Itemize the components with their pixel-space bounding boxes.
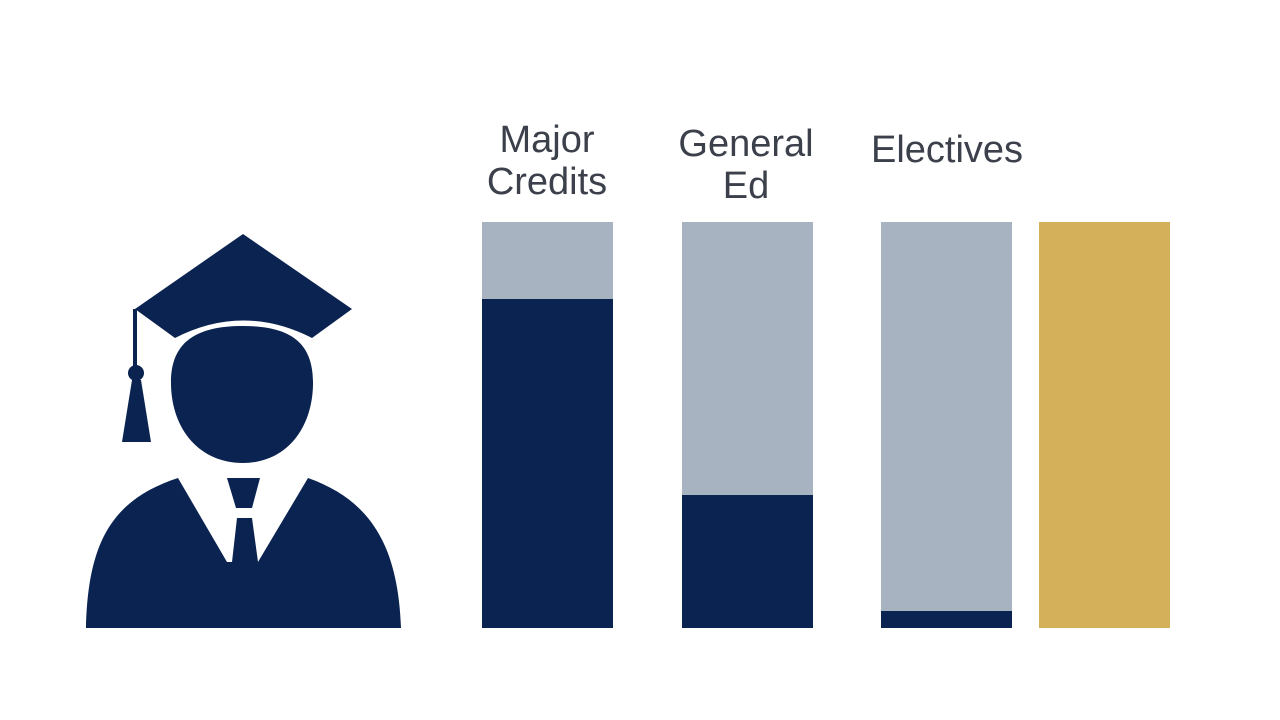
label: general ed: General	[678, 123, 814, 165]
label: electives: Electives	[871, 129, 1023, 171]
icon: graduation cap	[135, 234, 352, 338]
bar: major credits	[482, 222, 613, 628]
label: major credits: Credits	[487, 161, 607, 203]
icon: head	[171, 326, 313, 463]
bar: electives	[881, 222, 1012, 628]
label: general ed: Ed	[723, 165, 769, 207]
bar: gold	[1039, 222, 1170, 628]
icon: tassel	[122, 309, 151, 442]
label: major credits	[487, 119, 607, 203]
label: major credits: Major	[499, 119, 595, 161]
icon: body	[86, 478, 401, 628]
bar: general ed	[682, 222, 813, 628]
icon: tie knot	[227, 478, 260, 508]
label: general ed	[678, 123, 814, 207]
